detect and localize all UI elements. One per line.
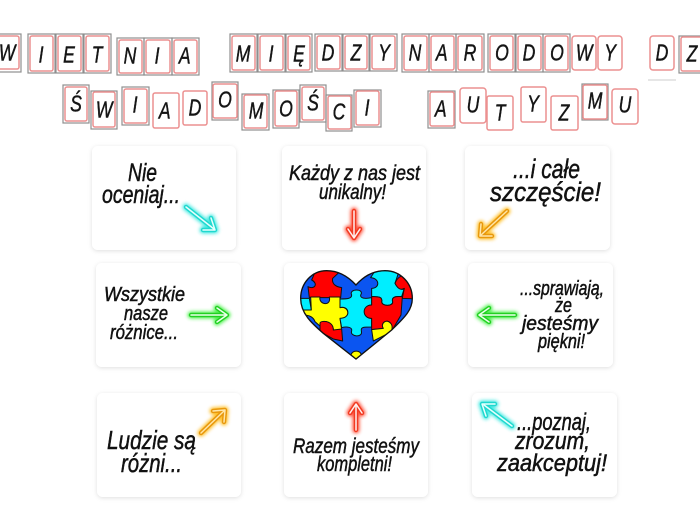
- title line 1: W: [576, 40, 594, 66]
- panel: i całe szczęście: [465, 146, 610, 250]
- title line 1: N: [409, 40, 422, 66]
- title line 2: M: [249, 98, 264, 124]
- title line 2: T: [495, 100, 507, 126]
- title line 1: D: [322, 40, 335, 66]
- arrow: orange up-right: [201, 410, 225, 433]
- text: razem jesteśmy kompletni: kompletni!: [317, 453, 392, 476]
- title line 1: D: [523, 40, 536, 66]
- title line 2: A: [157, 98, 171, 124]
- title line 1: Y: [378, 40, 391, 66]
- text: i całe szczęście: szczęście!: [490, 177, 601, 207]
- title line 2: [63, 82, 638, 131]
- text: sprawiają że jesteśmy piękni: ...sprawiają,: [520, 278, 604, 300]
- title line 2: M: [588, 88, 603, 114]
- text: wszystkie nasze różnice: nasze: [124, 303, 168, 325]
- panel: razem jesteśmy kompletni: [284, 393, 428, 497]
- title line 1: Z: [350, 40, 363, 66]
- panel: sprawiają że jesteśmy piękni: [468, 263, 613, 367]
- title line 2: Ś: [70, 90, 82, 117]
- title line 1: I: [39, 42, 44, 68]
- text: wszystkie nasze różnice: [104, 284, 185, 344]
- title line 2: C: [333, 99, 346, 125]
- arrow: green left: [479, 308, 515, 322]
- text: razem jesteśmy kompletni: Razem jesteśmy: [293, 435, 420, 458]
- text: ludzie są różni: różni...: [121, 448, 182, 478]
- title line 1: M: [236, 41, 251, 67]
- arrow: orange down-left: [480, 211, 507, 236]
- arrow: green right: [191, 308, 227, 322]
- text: każdy z nas jest unikalny: [289, 162, 421, 204]
- text: poznaj zrozum zaakceptuj: [496, 409, 607, 477]
- text: ludzie są różni: [107, 425, 196, 478]
- title line 1: [0, 34, 700, 75]
- text: nie oceniaj: Nie: [128, 159, 157, 187]
- title line 2: O: [279, 96, 293, 122]
- title line 2: U: [619, 92, 632, 118]
- title line 1: Z: [686, 41, 699, 67]
- text: poznaj zrozum zaakceptuj: zrozum,: [514, 428, 590, 455]
- title line 2: U: [467, 92, 480, 118]
- text: poznaj zrozum zaakceptuj: ...poznaj,: [517, 409, 591, 436]
- panel: wszystkie nasze różnice: [96, 263, 241, 367]
- text: wszystkie nasze różnice: Wszystkie: [104, 284, 185, 306]
- arrow: cyan up-left: [482, 404, 512, 426]
- title line 1: E: [63, 42, 75, 68]
- title line 2: W: [96, 97, 114, 123]
- title line 2: A: [433, 96, 447, 122]
- title line 2: Y: [527, 91, 540, 117]
- arrow: red up: [350, 404, 362, 430]
- title line 2: I: [365, 95, 370, 121]
- title line 1: T: [92, 42, 104, 68]
- title line 1: R: [464, 40, 477, 66]
- panel: każdy z nas: [282, 146, 426, 250]
- title line 2: Ś: [307, 89, 319, 116]
- text: nie oceniaj: [102, 159, 180, 209]
- panel: poznaj zrozum zaakceptuj: [472, 393, 617, 497]
- text: sprawiają że jesteśmy piękni: że: [554, 295, 572, 317]
- text: razem jesteśmy kompletni: [293, 435, 420, 476]
- text: każdy z nas jest unikalny: unikalny!: [319, 181, 386, 204]
- title line 2: D: [189, 95, 202, 121]
- arrow: cyan down-right: [186, 207, 215, 230]
- title line 1: N: [124, 43, 137, 69]
- text: sprawiają że jesteśmy piękni: piękni!: [537, 331, 585, 353]
- arrow: red down: [348, 211, 360, 238]
- title line 2: O: [218, 87, 232, 113]
- title line 1: Y: [604, 40, 617, 66]
- panel: puzzle heart: [284, 263, 428, 367]
- title line 2: Z: [558, 100, 571, 126]
- title line 1: I: [155, 43, 160, 69]
- title line 2: I: [133, 92, 138, 118]
- icon: puzzle heart: [298, 268, 417, 362]
- title line 1: O: [550, 40, 564, 66]
- title line 1: I: [269, 41, 274, 67]
- text: i całe szczęście: ...i całe: [513, 154, 580, 184]
- text: ludzie są różni: Ludzie są: [107, 425, 196, 455]
- title line 1: D: [656, 40, 669, 66]
- title line 1: A: [434, 40, 448, 66]
- text: poznaj zrozum zaakceptuj: zaakceptuj!: [496, 450, 607, 477]
- text: nie oceniaj: oceniaj...: [102, 181, 180, 209]
- text: sprawiają że jesteśmy piękni: [519, 278, 604, 353]
- panel: ludzie są różni: [97, 393, 241, 497]
- text: wszystkie nasze różnice: różnice...: [110, 322, 178, 344]
- panel: nie oceniaj: [92, 146, 236, 250]
- text: i całe szczęście: [490, 154, 601, 207]
- text: sprawiają że jesteśmy piękni: jesteśmy: [519, 313, 599, 335]
- text: każdy z nas jest unikalny: Każdy z nas jest: [289, 162, 421, 185]
- title line 1: Ę: [293, 41, 305, 67]
- title line 1: A: [177, 43, 191, 69]
- title line 1: O: [495, 40, 509, 66]
